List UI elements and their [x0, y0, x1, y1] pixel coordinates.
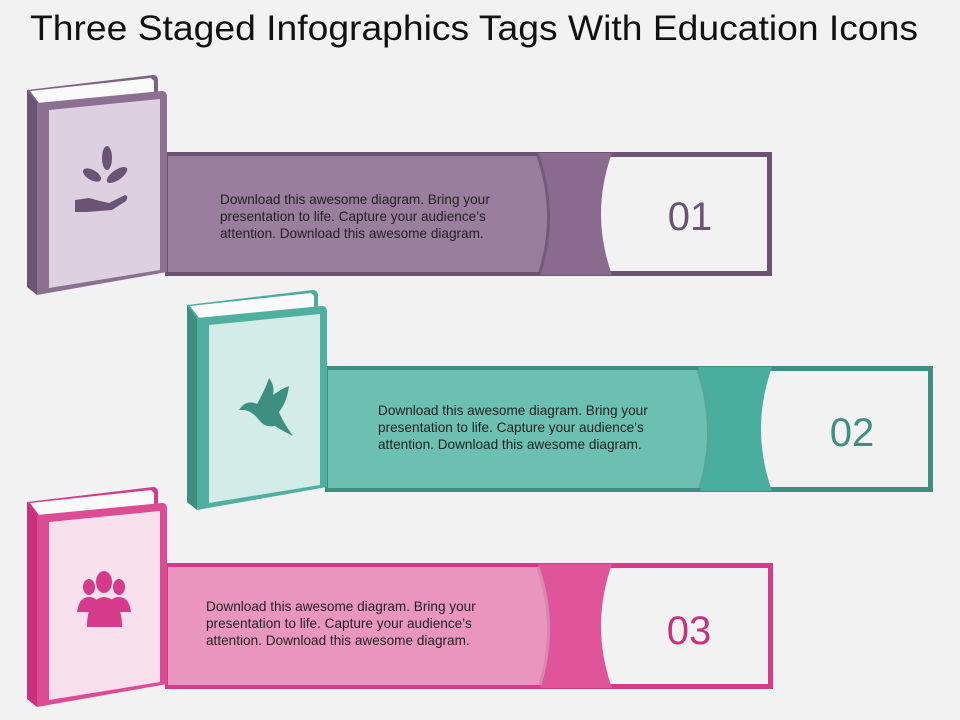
- text 3: presentation to life. Capture your audience’s: [206, 616, 472, 631]
- band 2: [325, 366, 933, 492]
- text 1: Download this awesome diagram. Bring your: [220, 192, 490, 207]
- number 03: 03: [667, 609, 711, 653]
- book 2: [187, 290, 327, 510]
- number 01: 01: [668, 195, 712, 239]
- icon: plant in hand: [75, 146, 130, 212]
- book 1: [27, 75, 167, 295]
- text 2: attention. Download this awesome diagram.: [378, 437, 642, 452]
- panel: row 1: [27, 75, 772, 295]
- icon: people: [77, 571, 131, 627]
- icon: dove: [239, 378, 293, 436]
- text 2: presentation to life. Capture your audience’s: [378, 420, 644, 435]
- panel: row 2: [187, 290, 933, 510]
- text 2: Download this awesome diagram. Bring your: [378, 403, 648, 418]
- book 3: [27, 487, 167, 707]
- text 3: Download this awesome diagram. Bring your: [206, 599, 476, 614]
- text 1: presentation to life. Capture your audience’s: [220, 209, 486, 224]
- band 1: [165, 152, 772, 276]
- band 3: [165, 563, 773, 689]
- number 02: 02: [830, 411, 874, 455]
- text 1: attention. Download this awesome diagram.: [220, 226, 484, 241]
- panel: row 3: [27, 487, 773, 707]
- title: Three Staged Infographics Tags With Education Icons: [30, 9, 918, 48]
- text 3: attention. Download this awesome diagram.: [206, 633, 470, 648]
